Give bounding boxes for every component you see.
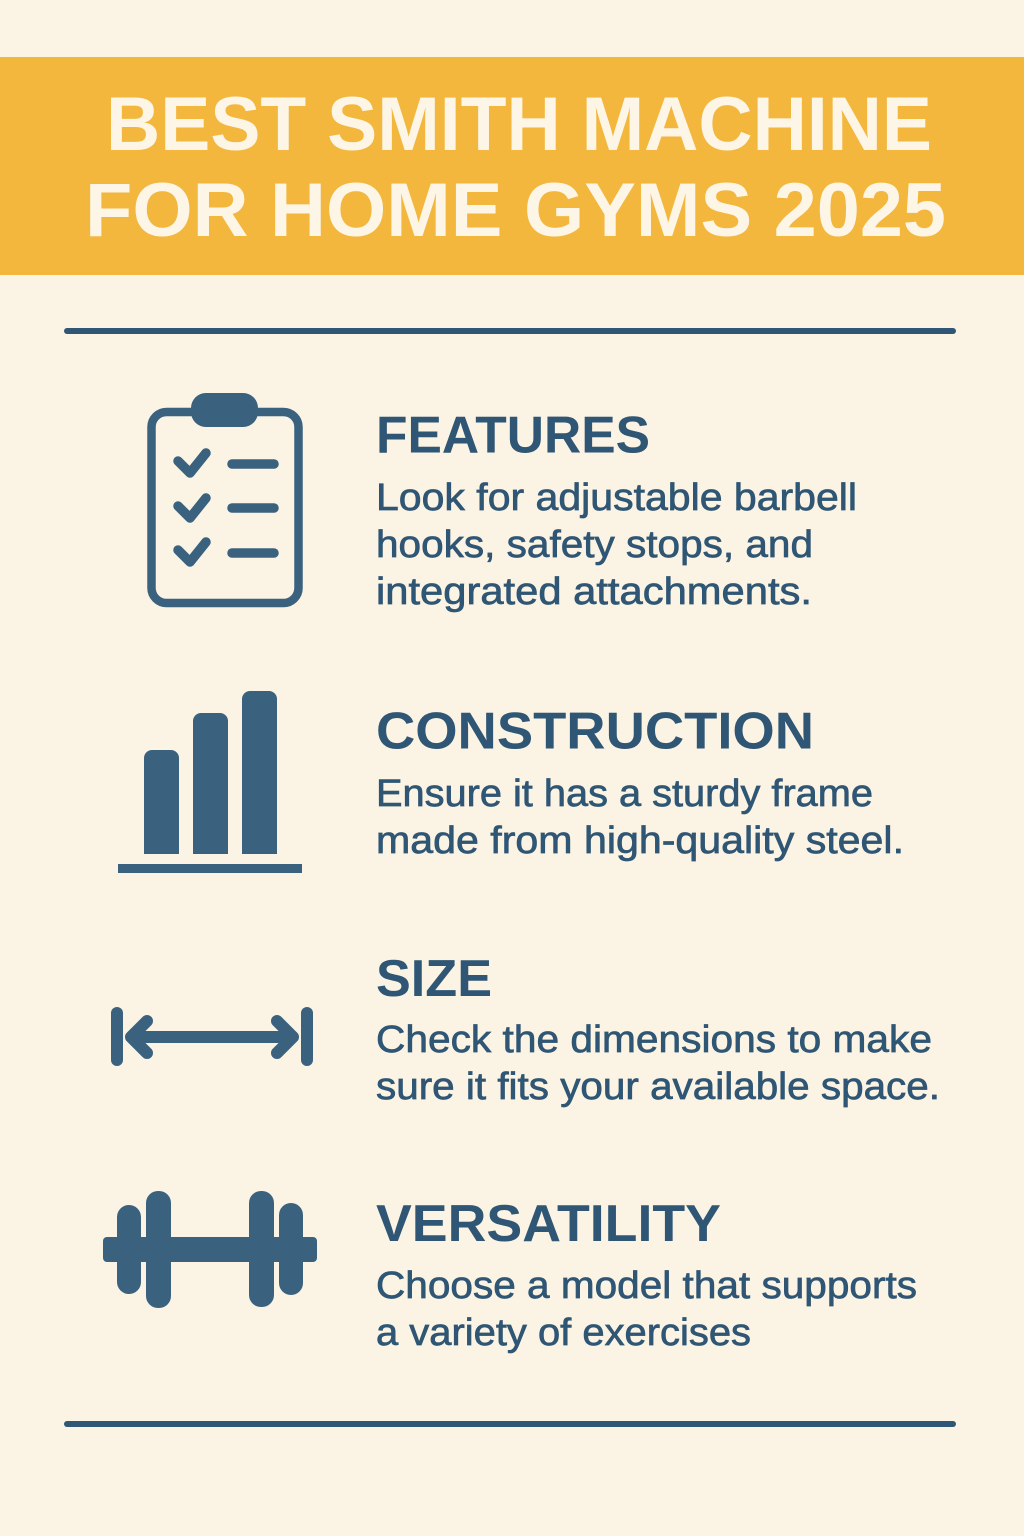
section: construction: made from high-quality steel. — [376, 820, 904, 862]
section: size — [376, 950, 940, 1108]
section: construction — [376, 702, 904, 862]
title banner: FOR HOME GYMS 2025 — [85, 168, 946, 253]
title banner — [0, 57, 1024, 275]
section: features: integrated attachments. — [376, 571, 812, 613]
section: features: Look for adjustable barbell — [376, 477, 857, 519]
section: versatility: Choose a model that supports — [376, 1265, 917, 1307]
icon: clipboard checklist — [152, 393, 298, 603]
section: features — [376, 406, 857, 613]
title banner: BEST SMITH MACHINE — [106, 82, 932, 167]
section: size: Check the dimensions to make — [376, 1019, 932, 1061]
icon: bar chart — [118, 691, 302, 873]
icon: dumbbell — [103, 1191, 317, 1308]
section: versatility: VERSATILITY — [376, 1195, 721, 1253]
section: size: sure it fits your available space. — [376, 1066, 940, 1108]
section: features: hooks, safety stops, and — [376, 524, 813, 566]
section: size: SIZE — [376, 950, 492, 1008]
section: construction: CONSTRUCTION — [376, 702, 814, 760]
section: features: FEATURES — [376, 406, 650, 464]
section: versatility: a variety of exercises — [376, 1312, 751, 1354]
section: versatility — [376, 1195, 917, 1354]
section: construction: Ensure it has a sturdy frame — [376, 773, 873, 815]
icon: width arrow — [111, 1007, 313, 1066]
